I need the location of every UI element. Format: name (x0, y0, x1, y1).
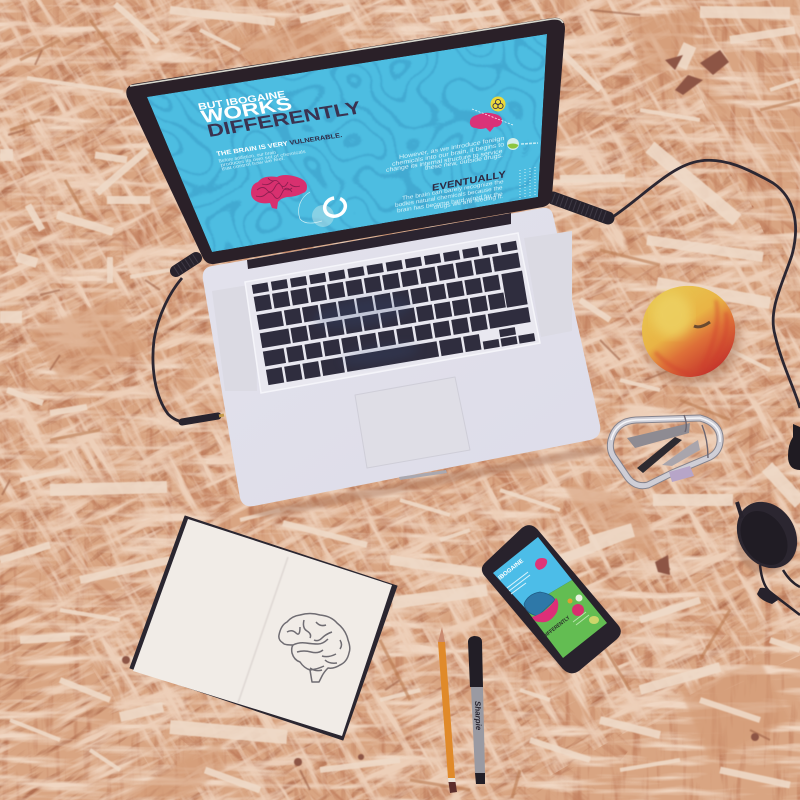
laptop shadow (245, 445, 608, 518)
carabiner loop (610, 418, 720, 486)
phone small pink brain (535, 558, 547, 570)
pencil end (448, 782, 457, 793)
black pocket knife (637, 437, 682, 473)
flask icon (507, 138, 538, 150)
marker brand: Sharpie (473, 701, 483, 731)
phone leaf icon (589, 616, 599, 624)
notebook cover (130, 516, 397, 740)
left body copy: Before addiction, our brain (218, 150, 277, 163)
keyboard keys (252, 245, 535, 386)
apple stem (694, 322, 710, 327)
apple shadow (644, 300, 740, 384)
apple highlight (652, 293, 692, 337)
trackpad (355, 377, 470, 468)
phone green copy lines (573, 612, 589, 625)
phone screen (493, 537, 607, 658)
centre fold (238, 557, 288, 703)
headphone shadow (736, 510, 796, 574)
apple body (642, 286, 735, 377)
marker cap (468, 636, 483, 687)
phone pink brain half (532, 598, 558, 622)
phone heading: IBOGAINE (498, 558, 525, 582)
notebook pages (133, 519, 392, 736)
right paragraph: chemicals into our brain, it begins to (392, 142, 505, 168)
ring wires (684, 415, 708, 458)
phone body copy lines (507, 572, 530, 594)
sharpie marker (468, 636, 485, 784)
keyboard well (245, 233, 540, 393)
eventually paragraph: bodies natural chemicals because the (395, 185, 502, 209)
infographic heading (198, 90, 359, 137)
phone body (483, 527, 619, 672)
headphones (725, 490, 800, 615)
pencil tip (438, 627, 445, 642)
biohazard badge (490, 96, 506, 112)
pencil ferrule (448, 778, 456, 782)
screen (140, 30, 550, 255)
screw lock sleeve (669, 466, 694, 482)
ear cup (725, 490, 800, 580)
phone shadow (484, 572, 622, 674)
eventually heading: EVENTUALLY (432, 169, 507, 194)
lid top highlight (130, 19, 563, 86)
dotted decoration (520, 167, 535, 200)
speaker panels (212, 231, 572, 391)
pink brain illustration (251, 175, 307, 209)
right paragraph: However, as we introduce foreign (399, 136, 504, 161)
marker end cap (475, 773, 485, 784)
left body copy: that control how we feel. (221, 156, 285, 171)
eventually paragraph: drugs we are feeding it. (434, 194, 504, 211)
phone flask icon (568, 594, 584, 616)
screen reflection on keys (311, 290, 421, 373)
pencil body (438, 642, 455, 778)
left body copy: produces its own set of chemicals (220, 149, 307, 167)
right paragraph: these new, outside drugs. (425, 153, 503, 172)
dark brown knots (122, 50, 759, 766)
smartphone (483, 527, 622, 674)
infographic heading: BUT IBOGAINE (197, 89, 287, 113)
black object at right edge (788, 424, 800, 470)
apple red blush (655, 300, 727, 374)
carabiner with keys (610, 415, 720, 486)
green section (525, 580, 607, 658)
ring and circle graphic (299, 192, 348, 227)
eventually paragraph (395, 179, 504, 215)
laptop (126, 18, 608, 518)
front notch (399, 470, 447, 480)
eventually paragraph: The brain can barely recognize the (402, 179, 504, 202)
prong (737, 502, 742, 518)
laptop base (203, 208, 600, 506)
orange pencil (438, 627, 457, 793)
phone blue brain half (524, 592, 555, 616)
eventually paragraph: brain has become hard-wired for the (397, 191, 503, 215)
marker barrel (471, 687, 485, 773)
left coiled cable with audio jack (153, 258, 224, 422)
inline remote (757, 588, 778, 604)
laptop lid (126, 18, 565, 264)
infographic heading: DIFFERENTLY (205, 97, 363, 141)
right paragraph (386, 136, 505, 174)
apple (642, 286, 740, 384)
cup inner shade (731, 502, 797, 574)
brain sketch (279, 614, 350, 682)
open notebook (130, 516, 397, 740)
headphone cable (760, 565, 800, 615)
infographic heading: WORKS (199, 94, 294, 127)
left body copy (218, 150, 306, 170)
phone lower heading: DIFFERENTLY (543, 615, 572, 640)
silver key (662, 440, 700, 466)
small pink brain with dashed line (470, 109, 513, 132)
brain pattern background (140, 30, 550, 255)
nail clipper (627, 423, 690, 448)
subheading: the brain is very vulnerable: THE BRAIN IS VERY VULNERABLE. (216, 132, 343, 158)
right paragraph: change its internal structure to service (386, 149, 503, 174)
right coiled cable (553, 160, 800, 408)
blue section (493, 537, 572, 608)
hinge (247, 213, 511, 269)
